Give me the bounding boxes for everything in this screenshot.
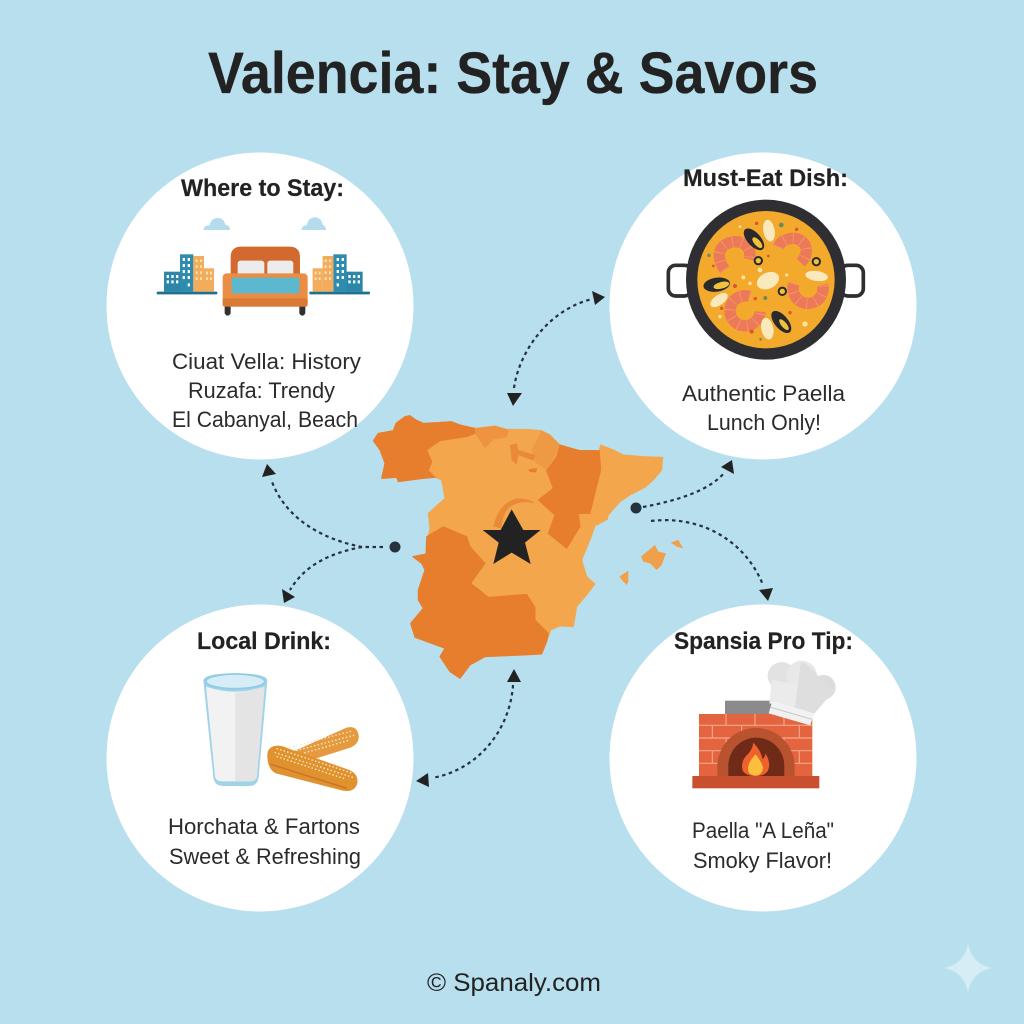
icon: horchata and fartons [203, 673, 359, 791]
heading: must-eat dish: Must-Eat Dish: [683, 165, 848, 192]
icon: wood-fired oven and chef hat [692, 661, 836, 788]
panel: pro tip [610, 604, 916, 912]
arrow: map to where to stay [262, 464, 400, 552]
icon: star [483, 509, 541, 564]
icon: bed and city [157, 217, 370, 316]
arrow: map to local drink [282, 547, 362, 603]
panel: must-eat dish [610, 152, 916, 460]
map of Spain [373, 416, 683, 678]
arrow: bottom two-way [416, 669, 521, 787]
text: must-eat dish: Lunch Only! [707, 410, 821, 435]
title: Valencia: Stay & Savors [208, 41, 818, 106]
text: local drink: Sweet & Refreshing [169, 844, 361, 869]
text: must-eat dish [682, 381, 846, 435]
icon: sparkle [944, 944, 992, 992]
text: pro tip: Smoky Flavor! [693, 848, 832, 873]
text: local drink [168, 814, 361, 869]
text: local drink: Horchata & Fartons [168, 814, 360, 839]
text: where to stay list: El Cabanyal, Beach [172, 407, 358, 432]
arrow: map to must-eat dish [630, 460, 734, 514]
footer credit: © Spanaly.com [427, 969, 601, 997]
text: must-eat dish: Authentic Paella [682, 381, 846, 406]
text: pro tip: Paella "A Leña" [692, 818, 834, 843]
arrow: top two-way [507, 291, 605, 406]
arrow: map to pro tip [651, 520, 773, 601]
text: where to stay list: Ciuat Vella: History [172, 349, 361, 374]
panel: where to stay [106, 152, 414, 460]
heading: local drink: Local Drink: [197, 628, 331, 655]
panel: local drink [106, 604, 414, 912]
heading: where to stay: Where to Stay: [181, 175, 344, 202]
text: where to stay list: Ruzafa: Trendy [188, 378, 335, 403]
text: where to stay list [172, 349, 361, 432]
icon: paella pan [668, 200, 863, 360]
heading: pro tip: Spansia Pro Tip: [674, 628, 853, 655]
text: pro tip [692, 818, 834, 873]
